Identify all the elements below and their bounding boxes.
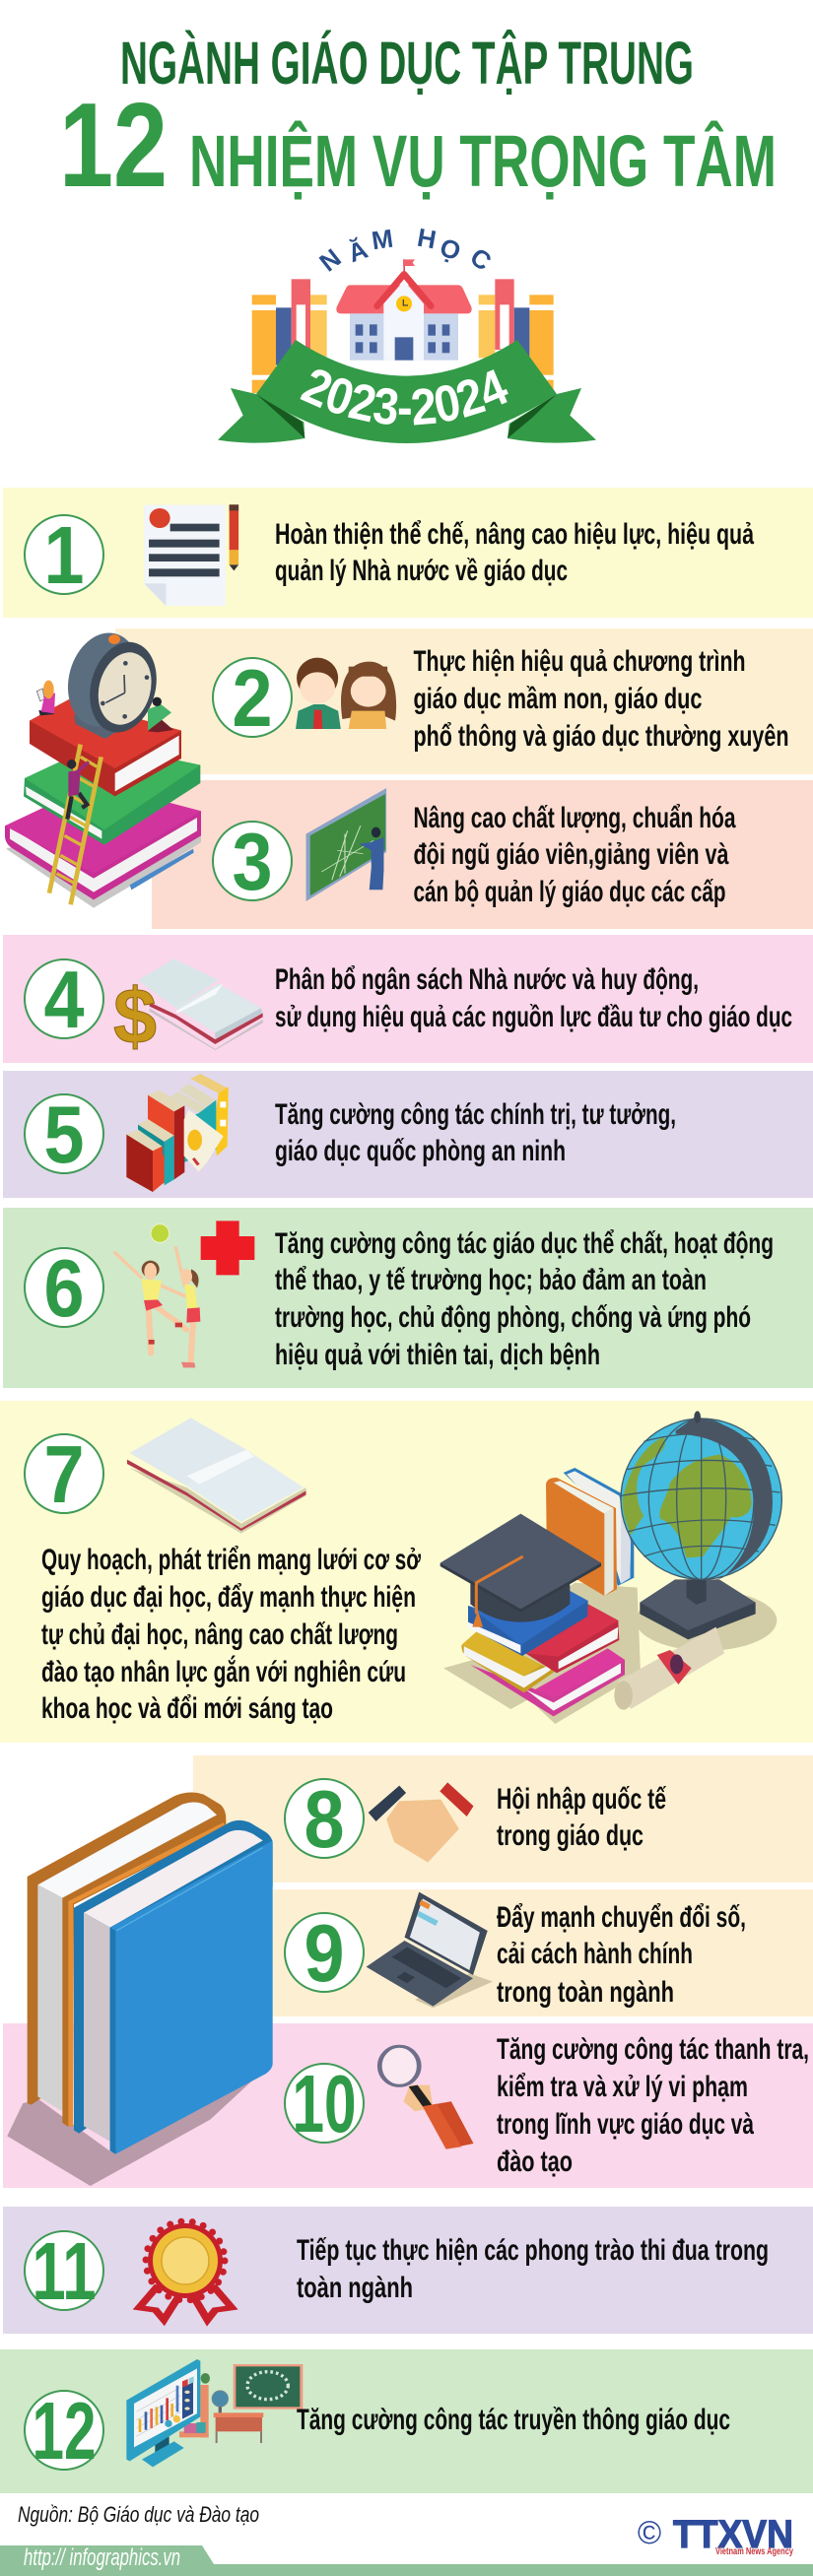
panel 8 xyxy=(193,1755,813,1882)
big number 12: 12 xyxy=(59,78,168,212)
book stack xyxy=(461,1591,625,1716)
panel 3 background xyxy=(152,780,813,929)
panel 1 text: quản lý Nhà nước về giáo dục xyxy=(275,555,568,587)
number badge 4 xyxy=(25,954,103,1045)
panel 2 background xyxy=(115,628,813,774)
curved label: năm học: C xyxy=(465,241,497,277)
alarm clock xyxy=(58,625,167,740)
icon: handshake xyxy=(369,1782,474,1863)
illustration: clock on book stack xyxy=(5,625,201,908)
panel 10 background xyxy=(3,2023,813,2188)
monitor xyxy=(126,2359,200,2467)
orange book xyxy=(28,1793,226,2126)
chalkboard xyxy=(234,2364,303,2410)
panel 1 text xyxy=(275,518,754,587)
seated person with tablet xyxy=(36,681,55,715)
number badge 9: 9 xyxy=(304,1907,345,1999)
title xyxy=(59,30,777,212)
panel 9 text xyxy=(497,1901,746,2009)
panel 10 xyxy=(3,2023,813,2188)
agency wordmark: TTXVN xyxy=(673,2513,793,2556)
icon: two girls playing ball xyxy=(115,1224,200,1367)
graduation cap xyxy=(440,1514,601,1627)
panel 7 background xyxy=(0,1401,813,1743)
panel 5 background xyxy=(3,1071,813,1198)
source note: Nguồn: Bộ Giáo dục và Đào tạo xyxy=(18,2502,259,2527)
panel 8 background xyxy=(193,1755,813,1882)
blue book xyxy=(74,1820,273,2154)
number badge 6: 6 xyxy=(43,1242,85,1334)
number badge 12: 12 xyxy=(32,2385,97,2477)
number badge 10: 10 xyxy=(292,2058,357,2149)
number badge 9 xyxy=(285,1907,364,1999)
panel 11 text: toàn ngành xyxy=(297,2272,413,2304)
panel 7 text: khoa học và đổi mới sáng tạo xyxy=(41,1692,333,1725)
panel 9 text: cải cách hành chính xyxy=(497,1938,693,1970)
green ribbon xyxy=(218,340,596,443)
icon: dollar sign: $ xyxy=(113,972,157,1060)
panel 7 text: đào tạo nhân lực gắn với nghiên cứu xyxy=(41,1655,406,1688)
panel 7 text: tự chủ đại học, nâng cao chất lượng xyxy=(41,1618,398,1651)
panel 1 xyxy=(3,488,813,618)
number badge 1: 1 xyxy=(43,509,85,601)
panel 7 text: giáo dục đại học, đẩy mạnh thực hiện xyxy=(41,1581,416,1614)
number badge 7: 7 xyxy=(43,1428,85,1520)
panel 2 text xyxy=(414,645,788,753)
curved label: năm học: N xyxy=(313,242,347,278)
number badge 6 xyxy=(25,1242,103,1334)
panel 9 xyxy=(193,1889,813,2016)
school year badge xyxy=(218,223,596,443)
panel 2 text: giáo dục mầm non, giáo dục xyxy=(414,683,702,715)
shadows xyxy=(443,1583,777,1724)
number badge 5: 5 xyxy=(43,1089,85,1180)
shelf xyxy=(179,2373,210,2437)
panel 2 xyxy=(115,628,813,774)
number badge 8: 8 xyxy=(304,1773,345,1865)
panel 7 xyxy=(0,1401,813,1743)
yellow ladder xyxy=(49,745,102,904)
curved label: năm học xyxy=(313,223,497,278)
panel 6 text: hiệu quả với thiên tai, dịch bệnh xyxy=(275,1339,600,1371)
panel 8 text xyxy=(497,1783,666,1852)
climbing person xyxy=(67,760,89,820)
icon: medal xyxy=(139,2221,232,2320)
icon: classroom with monitor xyxy=(126,2359,303,2467)
icon: globe, cap, books and scroll xyxy=(440,1411,781,1724)
icon: open book xyxy=(138,958,263,1050)
panel 11 xyxy=(3,2207,813,2334)
panel 4 text xyxy=(275,963,792,1033)
panel 5 text: giáo dục quốc phòng an ninh xyxy=(275,1135,566,1167)
blue pencil xyxy=(130,849,194,890)
icon: magnifying glass xyxy=(379,2046,474,2149)
panel 6 background xyxy=(3,1208,813,1388)
icon: two students xyxy=(296,658,396,729)
panel 11 text xyxy=(297,2234,769,2304)
year label: 2023-2024 xyxy=(300,369,508,426)
curved label: năm học: Ă xyxy=(344,234,372,268)
globe stand xyxy=(640,1579,756,1639)
panel 12 xyxy=(0,2349,813,2493)
icon: teacher at blackboard xyxy=(306,788,386,901)
number badge 1 xyxy=(25,509,103,601)
panel 12 background xyxy=(0,2349,813,2493)
globe arc xyxy=(676,1417,773,1581)
panel 3 text xyxy=(414,802,736,908)
number badge 3 xyxy=(213,816,292,907)
icon: document and pen xyxy=(144,504,238,606)
panel 8 text: trong giáo dục xyxy=(497,1819,644,1852)
desk xyxy=(214,2412,263,2443)
seated person in green xyxy=(148,697,173,732)
website url: http:// infographics.vn xyxy=(24,2544,180,2571)
icon: red cross xyxy=(201,1221,254,1275)
number badge 2 xyxy=(213,652,292,744)
illustration: large standing books xyxy=(7,1793,273,2186)
panel 9 text: trong toàn ngành xyxy=(497,1976,674,2009)
icon: laptop xyxy=(367,1892,493,2008)
TTXVN logo xyxy=(638,2513,793,2557)
icon: stack of books xyxy=(126,1074,229,1192)
number badge 3: 3 xyxy=(233,816,272,907)
globe xyxy=(621,1419,781,1579)
panel 7 text: Quy hoạch, phát triển mạng lưới cơ sở xyxy=(41,1544,421,1576)
panel 4 background xyxy=(3,935,813,1063)
number badge 11: 11 xyxy=(32,2225,97,2317)
number badge 7 xyxy=(25,1428,103,1520)
panel 3 xyxy=(152,780,813,929)
diploma scroll xyxy=(614,1627,724,1710)
panel 8 text: Hội nhập quốc tế xyxy=(497,1783,666,1816)
small globe xyxy=(212,2391,229,2412)
copyright symbol: © xyxy=(638,2514,661,2550)
panel 10 text: đào tạo xyxy=(497,2146,573,2178)
red book xyxy=(30,699,181,796)
magenta book xyxy=(5,783,201,899)
curved label: năm học: H xyxy=(415,223,439,254)
panel 11 background xyxy=(3,2207,813,2334)
footer band xyxy=(0,2545,813,2576)
panel 9 background xyxy=(193,1889,813,2016)
panel 10 text xyxy=(497,2033,809,2178)
book shadow xyxy=(7,2077,256,2186)
number badge 5 xyxy=(25,1089,103,1180)
panel 1 background xyxy=(3,488,813,618)
icon: school with books xyxy=(252,259,554,393)
panel 4 xyxy=(3,935,813,1063)
number badge 8 xyxy=(285,1773,364,1865)
panel 5 xyxy=(3,1071,813,1198)
footer bar xyxy=(0,2544,813,2576)
curved label: năm học: Ọ xyxy=(437,232,464,266)
panel 6 xyxy=(3,1208,813,1388)
number badge 2: 2 xyxy=(233,652,272,744)
panel 6 text xyxy=(275,1227,774,1371)
stack shadow xyxy=(6,816,201,908)
icon: open book xyxy=(127,1418,306,1534)
number badge 4: 4 xyxy=(43,954,85,1045)
panel 7 text xyxy=(41,1544,421,1725)
panel 5 text xyxy=(275,1098,676,1167)
curved label: năm học: M xyxy=(370,224,395,255)
upright books xyxy=(546,1468,634,1596)
green book xyxy=(24,744,200,845)
